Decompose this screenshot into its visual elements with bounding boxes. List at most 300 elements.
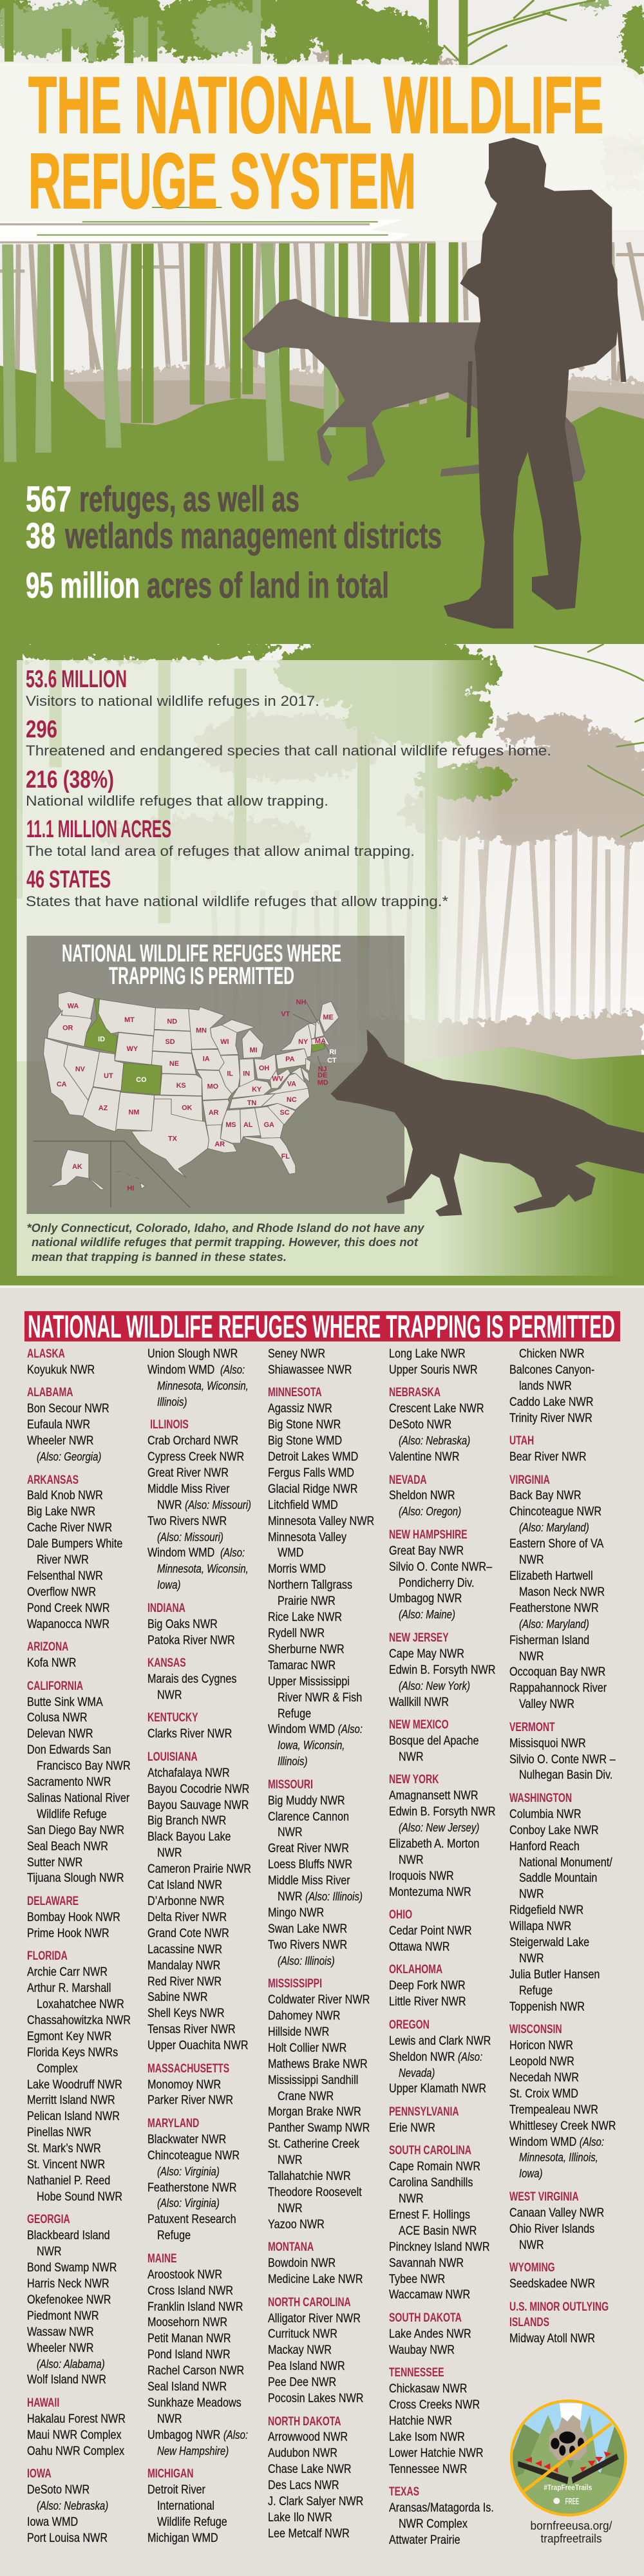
state labels: ME bbox=[323, 1014, 334, 1021]
hero panel: hiker and dog in forest bbox=[0, 0, 644, 644]
state: Michigan: MICHIGAN bbox=[147, 2467, 193, 2481]
state: New York: Iroquois NWR bbox=[389, 1869, 454, 1883]
state: New Hampshire: Great Bay NWR bbox=[389, 1544, 464, 1558]
state: Virginia: Elizabeth Hartwell bbox=[509, 1569, 593, 1583]
state: Louisiana: Big Branch NWR bbox=[147, 1814, 226, 1828]
state: Wyoming: WYOMING bbox=[509, 2260, 555, 2275]
stat: states: States that have national wildlife refuges that allow trapping.* bbox=[26, 893, 448, 909]
state: Iowa: Port Louisa NWR bbox=[27, 2531, 108, 2545]
state: Louisiana: Atchafalaya NWR bbox=[147, 1766, 230, 1780]
state: New York: Montezuma NWR bbox=[389, 1885, 471, 1899]
hero statistics: acres of land in total bbox=[147, 565, 389, 605]
state: Massachusetts: Monomoy NWR bbox=[147, 2078, 221, 2092]
state labels: MT bbox=[124, 1016, 135, 1024]
state: U.S. Minor Outlying Islands: Midway Atoll NWR bbox=[509, 2331, 595, 2345]
state: Texas: TEXAS bbox=[389, 2485, 419, 2499]
state: Virginia: (Also: Maryland) bbox=[519, 1618, 589, 1631]
state: North Dakota: Des Lacs NWR bbox=[268, 2478, 339, 2492]
state: North Carolina: NORTH CAROLINA bbox=[268, 2295, 351, 2309]
state labels: CA bbox=[57, 1081, 67, 1088]
state: Maine bbox=[147, 2251, 248, 2458]
state labels: IA bbox=[203, 1055, 210, 1063]
state: Ohio: Cedar Point NWR bbox=[389, 1924, 472, 1938]
state: Maryland: (Also: Virginia) bbox=[157, 2165, 220, 2178]
state: Oregon: OREGON bbox=[389, 2018, 430, 2032]
state: Mississippi: Dahomey NWR bbox=[268, 2009, 340, 2023]
state: Alabama: (Also: Georgia) bbox=[37, 1450, 101, 1463]
state: Wisconsin: Trempealeau NWR bbox=[509, 2103, 598, 2117]
state: Georgia: Wolf Island NWR bbox=[27, 2372, 106, 2387]
state: Oregon: Lewis and Clark NWR bbox=[389, 2034, 491, 2048]
state: Massachusetts: MASSACHUSETTS bbox=[147, 2061, 229, 2076]
state labels: KS bbox=[176, 1082, 186, 1090]
state: U.S. Minor Outlying Islands bbox=[509, 2299, 621, 2347]
hero statistics: refuges, as well as bbox=[79, 478, 299, 519]
badge text: FREE bbox=[565, 2496, 579, 2506]
map title: NATIONAL WILDLIFE REFUGES WHERE bbox=[62, 940, 341, 967]
state: Mississippi: Theodore Roosevelt bbox=[268, 2185, 362, 2199]
state: New York: Edwin B. Forsyth NWR bbox=[389, 1804, 495, 1819]
state labels: NV bbox=[75, 1065, 86, 1073]
state: Alabama: Bon Secour NWR bbox=[27, 1401, 109, 1416]
state: Florida: St. Vincent NWR bbox=[27, 2157, 105, 2172]
state: Florida: Archie Carr NWR bbox=[27, 1965, 108, 1979]
state: Washington: Saddle Mountain bbox=[519, 1871, 597, 1885]
state: Virginia: Back Bay NWR bbox=[509, 1488, 582, 1502]
state: Iowa: DeSoto NWR bbox=[27, 2483, 90, 2497]
state labels: HI bbox=[127, 1184, 134, 1192]
state: Arkansas: Big Lake NWR bbox=[27, 1504, 95, 1519]
state: South Dakota: Waubay NWR bbox=[389, 2343, 455, 2357]
state: New York: NWR bbox=[399, 1853, 424, 1867]
state: West Virginia: NWR bbox=[519, 2238, 544, 2252]
state: Hawaii bbox=[27, 2396, 126, 2458]
state: Pennsylvania: Erie NWR bbox=[389, 2121, 435, 2135]
stat: refuges allowing trapping bbox=[26, 766, 328, 809]
state: Michigan: Wildlife Refuge bbox=[157, 2515, 227, 2529]
state: Iowa: Iowa WMD bbox=[27, 2515, 78, 2529]
state: Georgia: Wheeler NWR bbox=[27, 2341, 93, 2355]
state: Nevada: (Also: Oregon) bbox=[399, 1505, 461, 1518]
state: North Carolina: Pee Dee NWR bbox=[268, 2375, 336, 2389]
state: Minnesota: MINNESOTA bbox=[268, 1385, 322, 1399]
state: Florida: Merritt Island NWR bbox=[27, 2093, 115, 2107]
state: Florida: Loxahatchee NWR bbox=[37, 1997, 124, 2011]
state: South Carolina: Waccamaw NWR bbox=[389, 2287, 470, 2302]
state: Georgia: Harris Neck NWR bbox=[27, 2277, 109, 2291]
state: North Dakota continued: Long Lake NWR bbox=[389, 1347, 466, 1361]
state: U.S. Minor Outlying Islands: U.S. MINOR OUTLYING bbox=[509, 2299, 609, 2313]
state: Ohio: Ottawa NWR bbox=[389, 1940, 450, 1954]
state: Mississippi: Hillside NWR bbox=[268, 2025, 329, 2039]
state: Washington: Julia Butler Hansen bbox=[509, 1967, 600, 1982]
stat: acres: The total land area of refuges that allow animal trapping. bbox=[26, 843, 415, 859]
state: New Jersey: Cape May NWR bbox=[389, 1647, 464, 1661]
state: New Hampshire: Silvio O. Conte NWR– bbox=[389, 1560, 492, 1574]
state: Nebraska: (Also: Nebraska) bbox=[399, 1434, 470, 1447]
state: Kansas: KANSAS bbox=[147, 1656, 186, 1670]
state: Florida: Arthur R. Marshall bbox=[27, 1981, 111, 1995]
state labels: SD bbox=[166, 1038, 175, 1046]
state: Mississippi: Mississippi Sandhill bbox=[268, 2073, 358, 2087]
state: Nevada bbox=[389, 1473, 461, 1519]
state: New Mexico: Bosque del Apache bbox=[389, 1734, 478, 1748]
state: North Dakota: Chase Lake NWR bbox=[268, 2462, 352, 2476]
hero statistics: 95 million bbox=[26, 565, 140, 605]
stat: visitors bbox=[26, 666, 319, 709]
state: North Dakota: Audubon NWR bbox=[268, 2446, 337, 2460]
state: Washington: Conboy Lake NWR bbox=[509, 1823, 599, 1837]
state: Wisconsin: Horicon NWR bbox=[509, 2038, 573, 2052]
badge: trap free trails bbox=[510, 2400, 627, 2517]
state: Minnesota: Northern Tallgrass bbox=[268, 1578, 352, 1592]
state: New Hampshire: Pondicherry Div. bbox=[399, 1576, 474, 1590]
state: Massachusetts: Parker River NWR bbox=[147, 2093, 233, 2107]
state: Louisiana: Upper Ouachita NWR bbox=[147, 2038, 249, 2052]
state: Utah bbox=[509, 1433, 621, 1465]
state: Georgia: Wassaw NWR bbox=[27, 2325, 94, 2339]
state: Kansas bbox=[147, 1656, 237, 1702]
state: Michigan: Michigan WMD bbox=[147, 2531, 218, 2545]
state labels: GA bbox=[264, 1121, 274, 1129]
state: Illinois: Minnesota, Wiconsin, bbox=[157, 1562, 249, 1575]
state: Kansas: Marais des Cygnes bbox=[147, 1672, 237, 1686]
state: Georgia: GEORGIA bbox=[27, 2212, 70, 2226]
state: West Virginia: Ohio River Islands bbox=[509, 2222, 594, 2236]
state labels: PA bbox=[285, 1056, 295, 1063]
state: Maine: Pond Island NWR bbox=[147, 2347, 231, 2362]
state: Tennessee: Lake Isom NWR bbox=[389, 2430, 465, 2444]
state: Georgia bbox=[27, 2212, 117, 2387]
state: Missouri: Clarence Cannon bbox=[268, 1810, 349, 1824]
state: Illinois: Iowa) bbox=[157, 1578, 180, 1591]
state: Wisconsin: Leopold NWR bbox=[509, 2054, 574, 2069]
state: Minnesota: WMD bbox=[278, 1546, 303, 1560]
state: Oregon bbox=[389, 2017, 501, 2097]
state labels: AZ bbox=[99, 1104, 108, 1112]
state: Arkansas: Pond Creek NWR bbox=[27, 1601, 110, 1615]
state: North Dakota: Lake Ilo NWR bbox=[268, 2510, 332, 2524]
campaign link bbox=[513, 2515, 629, 2553]
trapping statistics panel with map and fox bbox=[0, 644, 644, 1288]
state: Mississippi: Crane NWR bbox=[278, 2089, 334, 2103]
state: Delaware: Prime Hook NWR bbox=[27, 1926, 109, 1940]
state: Missouri: Two Rivers NWR bbox=[268, 1938, 347, 1952]
state: Maine: Aroostook NWR bbox=[147, 2268, 222, 2282]
state: Alaska: Koyukuk NWR bbox=[27, 1363, 95, 1377]
state: Mississippi: Morgan Brake NWR bbox=[268, 2105, 361, 2119]
state: Maine: New Hampshire) bbox=[157, 2445, 229, 2458]
state: Maine: MAINE bbox=[147, 2251, 177, 2266]
state: Louisiana: NWR bbox=[157, 1846, 182, 1860]
state: California: Salinas National River bbox=[27, 1791, 129, 1805]
state: West Virginia bbox=[509, 2189, 621, 2253]
state: Vermont: Nulhegan Basin Div. bbox=[519, 1768, 612, 1782]
state: California: Wildlife Refuge bbox=[37, 1807, 107, 1821]
state: South Carolina: ACE Basin NWR bbox=[399, 2224, 477, 2238]
state: North Carolina bbox=[268, 2295, 363, 2405]
state: Mississippi: Mathews Brake NWR bbox=[268, 2057, 368, 2071]
state labels: NC bbox=[287, 1096, 297, 1104]
state: California: San Diego Bay NWR bbox=[27, 1823, 124, 1837]
state: North Dakota: Arrowwood NWR bbox=[268, 2430, 348, 2444]
state: Louisiana: Lacassine NWR bbox=[147, 1942, 222, 1956]
state: Louisiana bbox=[147, 1750, 251, 2052]
state: South Carolina: Cape Romain NWR bbox=[389, 2159, 480, 2174]
state: Oregon: Nevada) bbox=[399, 2066, 435, 2079]
state: Virginia: Rappahannock River bbox=[509, 1681, 607, 1695]
state: California: Butte Sink WMA bbox=[27, 1695, 103, 1709]
state: Wisconsin: Necedah NWR bbox=[509, 2070, 579, 2085]
state: Arkansas: River NWR bbox=[37, 1553, 89, 1567]
state: Minnesota: River NWR & Fish bbox=[278, 1690, 362, 1705]
state: Mississippi bbox=[268, 1976, 370, 2231]
state: California: Don Edwards San bbox=[27, 1743, 111, 1757]
state: Wisconsin: St. Croix WMD bbox=[509, 2087, 578, 2101]
state: New York bbox=[389, 1772, 501, 1900]
state: Minnesota: Big Stone WMD bbox=[268, 1434, 342, 1448]
state: Missouri: NWR bbox=[278, 1825, 303, 1839]
state: Georgia: (Also: Alabama) bbox=[37, 2358, 105, 2371]
state: Maine: Rachel Carson NWR bbox=[147, 2363, 244, 2378]
state labels: UT bbox=[104, 1072, 113, 1080]
state: Minnesota: Big Stone NWR bbox=[268, 1417, 341, 1432]
state: Michigan continued: Seney NWR bbox=[268, 1347, 325, 1361]
state: Illinois: (Also: Missouri) bbox=[157, 1531, 223, 1544]
hero statistics: wetlands management districts bbox=[64, 515, 442, 556]
state labels: TN bbox=[247, 1099, 256, 1107]
state: Oklahoma: OKLAHOMA bbox=[389, 1962, 442, 1976]
state: Louisiana: Delta River NWR bbox=[147, 1910, 227, 1924]
state: Texas continued: Caddo Lake NWR bbox=[509, 1395, 593, 1409]
state: Wyoming bbox=[509, 2260, 621, 2292]
state: Ohio: OHIO bbox=[389, 1908, 412, 1922]
state: Arkansas: Overflow NWR bbox=[27, 1585, 96, 1599]
state labels: WI bbox=[220, 1038, 229, 1046]
stat: species: Threatened and endangered species that call national wildlife refuges home. bbox=[26, 743, 551, 759]
state: Missouri: Loess Bluffs NWR bbox=[268, 1857, 352, 1871]
list column 3 bbox=[268, 1347, 374, 2541]
footnote: mean that trapping is banned in these states. bbox=[32, 1251, 287, 1264]
state: Louisiana: Sabine NWR bbox=[147, 1990, 208, 2004]
state: Arizona: ARIZONA bbox=[27, 1640, 68, 1654]
state: Mississippi: St. Catherine Creek bbox=[268, 2137, 359, 2151]
state: Mississippi: Yazoo NWR bbox=[268, 2217, 325, 2231]
green trunks bbox=[59, 242, 453, 423]
state: Louisiana: LOUISIANA bbox=[147, 1750, 198, 1764]
state: Washington: NWR bbox=[519, 1887, 544, 1901]
state: Texas: Attwater Prairie bbox=[389, 2533, 460, 2547]
state: California: Sacramento NWR bbox=[27, 1775, 111, 1789]
state: North Dakota: Lee Metcalf NWR bbox=[268, 2526, 350, 2541]
state: Hawaii: Maui NWR Complex bbox=[27, 2428, 122, 2442]
state: Alabama: ALABAMA bbox=[27, 1385, 73, 1399]
state: Washington: Columbia NWR bbox=[509, 1807, 582, 1821]
state: Hawaii: Hakalau Forest NWR bbox=[27, 2412, 126, 2426]
state: Indiana: Big Oaks NWR bbox=[147, 1617, 218, 1631]
state: New Hampshire: (Also: Maine) bbox=[399, 1608, 455, 1621]
state: California: Francisco Bay NWR bbox=[37, 1759, 131, 1773]
state: Minnesota: Refuge bbox=[278, 1707, 311, 1721]
state: Minnesota: Illinois) bbox=[278, 1755, 307, 1768]
state: Minnesota: Prairie NWR bbox=[278, 1594, 336, 1608]
state: North Carolina: Alligator River NWR bbox=[268, 2311, 361, 2325]
state: Maine: Moosehorn NWR bbox=[147, 2315, 227, 2329]
state: Tennessee: Lower Hatchie NWR bbox=[389, 2446, 484, 2460]
state: U.S. Minor Outlying Islands: ISLANDS bbox=[509, 2315, 549, 2329]
light trunks bbox=[2, 242, 336, 462]
state: Minnesota: Sherburne NWR bbox=[268, 1642, 345, 1656]
stat: acres bbox=[26, 816, 415, 859]
state: Washington: NWR bbox=[519, 1951, 544, 1965]
state: Illinois: Two Rivers NWR bbox=[147, 1514, 227, 1528]
state: Minnesota bbox=[268, 1385, 374, 1768]
state: Louisiana: Cameron Prairie NWR bbox=[147, 1862, 251, 1876]
background trunks bbox=[0, 242, 644, 394]
hero statistics bbox=[26, 478, 442, 605]
state: Pennsylvania bbox=[389, 2104, 501, 2136]
state: Ohio bbox=[389, 1907, 501, 1955]
state: New Mexico: NWR bbox=[399, 1750, 424, 1764]
state: New Hampshire bbox=[389, 1528, 492, 1622]
state: Virginia: VIRGINIA bbox=[509, 1473, 550, 1487]
state: Delaware: Bombay Hook NWR bbox=[27, 1910, 120, 1924]
state: Maryland: Featherstone NWR bbox=[147, 2181, 237, 2195]
state: Florida: Complex bbox=[37, 2061, 78, 2076]
state: Minnesota: Fergus Falls WMD bbox=[268, 1466, 354, 1480]
state: Iowa continued bbox=[147, 1347, 249, 1409]
state: Iowa continued: Windom WMD (Also: bbox=[147, 1363, 245, 1377]
state: Tennessee: Cross Creeks NWR bbox=[389, 2398, 480, 2412]
state: Florida: Lake Woodruff NWR bbox=[27, 2078, 122, 2092]
state: Louisiana: Bayou Cocodrie NWR bbox=[147, 1782, 249, 1796]
state: Louisiana: Cat Island NWR bbox=[147, 1878, 222, 1892]
title bbox=[28, 61, 603, 225]
state: California: Tijuana Slough NWR bbox=[27, 1871, 124, 1885]
state: Washington: Toppenish NWR bbox=[509, 2000, 585, 2014]
state: Florida: Nathaniel P. Reed bbox=[27, 2174, 110, 2188]
state: Iowa: (Also: Nebraska) bbox=[37, 2499, 108, 2512]
icon: pine trees bbox=[513, 2415, 625, 2514]
icon: prohibition slash bbox=[524, 2423, 611, 2491]
state: South Dakota: SOUTH DAKOTA bbox=[389, 2311, 462, 2325]
state: Missouri: NWR (Also: Illinois) bbox=[278, 1889, 363, 1904]
state: Minnesota: Detroit Lakes WMD bbox=[268, 1450, 358, 1464]
state labels: MN bbox=[196, 1027, 207, 1034]
state: West Virginia: WEST VIRGINIA bbox=[509, 2190, 579, 2204]
state: Wisconsin: Windom WMD (Also: bbox=[509, 2135, 604, 2149]
state: Florida: Chassahowitzka NWR bbox=[27, 2013, 131, 2027]
state: Vermont: Missisquoi NWR bbox=[509, 1736, 586, 1750]
state: Nebraska: DeSoto NWR bbox=[389, 1417, 451, 1432]
state labels: WA bbox=[68, 1003, 79, 1010]
state labels bbox=[57, 998, 337, 1192]
state: Virginia: Featherstone NWR bbox=[509, 1601, 599, 1615]
state: Montana: MONTANA bbox=[268, 2240, 314, 2254]
state: California: Colusa NWR bbox=[27, 1710, 88, 1725]
state: North Dakota: J. Clark Salyer NWR bbox=[268, 2494, 363, 2508]
state: Arkansas: Felsenthal NWR bbox=[27, 1569, 103, 1583]
state: Texas: Aransas/Matagorda Is. bbox=[389, 2501, 494, 2515]
state: North Carolina: Pea Island NWR bbox=[268, 2359, 345, 2373]
dog silhouette bbox=[242, 299, 585, 482]
hiker silhouette bbox=[444, 138, 627, 629]
state: Virginia: Eastern Shore of VA bbox=[509, 1537, 603, 1551]
map title: TRAPPING IS PERMITTED bbox=[109, 963, 294, 990]
state: Virginia: Valley NWR bbox=[519, 1697, 574, 1711]
state: South Carolina: Savannah NWR bbox=[389, 2256, 464, 2270]
state labels: MA bbox=[315, 1037, 326, 1045]
state labels: VA bbox=[287, 1080, 296, 1088]
state: Georgia: Blackbeard Island bbox=[27, 2228, 110, 2242]
state: New York: NEW YORK bbox=[389, 1772, 439, 1786]
state: New Jersey bbox=[389, 1631, 495, 1709]
state: Maryland: (Also: Virginia) bbox=[157, 2197, 220, 2210]
state: Washington: Willapa NWR bbox=[509, 1919, 571, 1933]
state labels: WV bbox=[272, 1075, 284, 1083]
state: Missouri: Swan Lake NWR bbox=[268, 1922, 347, 1936]
map panel bbox=[27, 936, 404, 1214]
state: Virginia: (Also: Maryland) bbox=[519, 1521, 589, 1534]
state: South Carolina: Ernest F. Hollings bbox=[389, 2208, 470, 2222]
state: California: Delevan NWR bbox=[27, 1727, 93, 1741]
state: North Carolina: Currituck NWR bbox=[268, 2327, 337, 2341]
state: Tennessee: Chickasaw NWR bbox=[389, 2382, 467, 2396]
state: Kentucky: Clarks River NWR bbox=[147, 1727, 232, 1741]
state: Missouri: MISSOURI bbox=[268, 1777, 313, 1792]
state: Mississippi: NWR bbox=[278, 2201, 303, 2215]
state: Maine: Sunkhaze Meadows bbox=[147, 2396, 242, 2410]
state: Texas continued bbox=[509, 1346, 621, 1426]
state: Washington: National Monument/ bbox=[519, 1855, 612, 1870]
state: Utah: UTAH bbox=[509, 1434, 534, 1448]
state: Louisiana: Bayou Sauvage NWR bbox=[147, 1798, 249, 1812]
state: Indiana bbox=[147, 1601, 235, 1647]
state: Michigan continued bbox=[268, 1347, 352, 1377]
state: South Dakota bbox=[389, 2310, 501, 2358]
list column 2 bbox=[147, 1347, 251, 2545]
state: Delaware: DELAWARE bbox=[27, 1894, 79, 1908]
state: Minnesota: Tamarac NWR bbox=[268, 1658, 336, 1672]
state: Alabama: Eufaula NWR bbox=[27, 1417, 90, 1432]
state: Oregon: Sheldon NWR (Also: bbox=[389, 2050, 482, 2064]
stat: visitors: 53.6 MILLION bbox=[26, 666, 127, 693]
state labels: CO bbox=[136, 1076, 147, 1084]
state: South Carolina bbox=[389, 2143, 501, 2303]
state: Louisiana: Black Bayou Lake bbox=[147, 1830, 231, 1844]
state: Nevada: Sheldon NWR bbox=[389, 1488, 455, 1502]
state: New York: Amagnansett NWR bbox=[389, 1788, 478, 1803]
state: Maine: NWR bbox=[157, 2412, 182, 2426]
footnote: *Only Connecticut, Colorado, Idaho, and Rhode Island do not have any bbox=[27, 1222, 424, 1235]
state labels: DE bbox=[317, 1072, 327, 1079]
state: Missouri: Big Muddy NWR bbox=[268, 1794, 345, 1808]
state: Iowa continued: Union Slough NWR bbox=[147, 1347, 238, 1361]
state: South Dakota: Lake Andes NWR bbox=[389, 2327, 471, 2341]
state labels: ID bbox=[98, 1036, 105, 1043]
state: Mississippi: Coldwater River NWR bbox=[268, 1993, 370, 2007]
state: North Dakota bbox=[268, 2414, 363, 2541]
state: Maryland: Blackwater NWR bbox=[147, 2132, 226, 2146]
stat: visitors: Visitors to national wildlife refuges in 2017. bbox=[26, 693, 319, 709]
state: Maryland: Chincoteague NWR bbox=[147, 2148, 240, 2163]
state: Missouri bbox=[268, 1777, 363, 1968]
state: Minnesota: Upper Mississippi bbox=[268, 1674, 350, 1689]
state labels: CT bbox=[327, 1057, 337, 1065]
state: Texas: NWR Complex bbox=[399, 2517, 468, 2531]
state: New Jersey: Wallkill NWR bbox=[389, 1695, 449, 1709]
state: Virginia: Chincoteague NWR bbox=[509, 1504, 601, 1519]
